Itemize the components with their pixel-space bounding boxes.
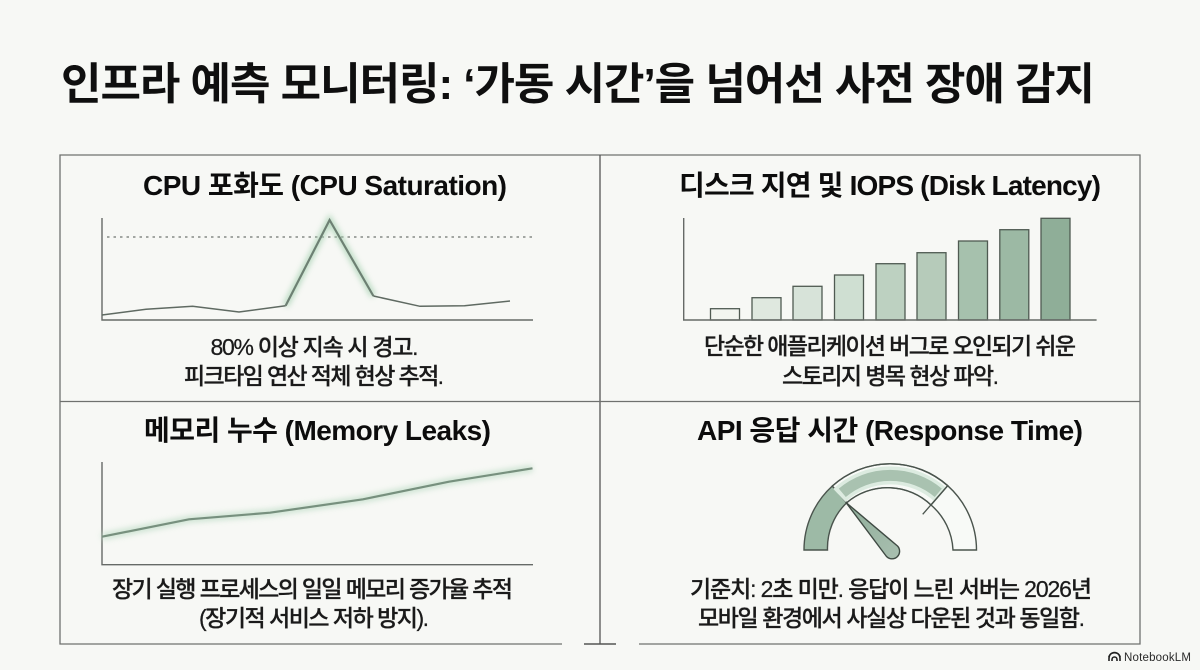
description: memory leaks bbox=[112, 576, 513, 631]
icon: NotebookLM logo bbox=[1108, 652, 1120, 661]
description: API response time: 모바일 환경에서 사실상 다운된 것과 동일함. bbox=[698, 605, 1085, 631]
gauge needle bbox=[846, 502, 900, 559]
description: disk latency: 스토리지 병목 현상 파악. bbox=[782, 363, 999, 389]
panel: memory leaks bbox=[102, 415, 533, 631]
description: CPU saturation: 80% 이상 지속 시 경고. bbox=[210, 334, 418, 360]
gauge: response time bbox=[804, 464, 976, 559]
gauge tick bbox=[923, 486, 948, 514]
heading: API response time: API 응답 시간 (Response Time) bbox=[697, 415, 1083, 446]
description: memory leaks: 장기 실행 프로세스의 일일 메모리 증가율 추적 bbox=[112, 576, 513, 602]
gauge right zone bbox=[931, 486, 976, 550]
heading: disk latency: 디스크 지연 및 IOPS (Disk Latency) bbox=[679, 170, 1101, 201]
title: 인프라 예측 모니터링: ‘가동 시간’을 넘어선 사전 장애 감지 bbox=[61, 60, 1095, 109]
panel: CPU saturation bbox=[102, 170, 533, 389]
heading: CPU saturation: CPU 포화도 (CPU Saturation) bbox=[143, 170, 507, 201]
panel: disk latency bbox=[679, 170, 1101, 389]
description: memory leaks: (장기적 서비스 저하 방지). bbox=[199, 605, 429, 631]
gauge left zone bbox=[804, 486, 847, 550]
panel: API response time bbox=[690, 415, 1092, 631]
description: CPU saturation: 피크타임 연산 적체 현상 추적. bbox=[184, 363, 444, 389]
panel grid frame bbox=[60, 155, 1140, 644]
description: API response time: 기준치: 2초 미만. 응답이 느린 서버는 2026년 bbox=[690, 576, 1092, 602]
bar chart: disk latency growth bbox=[684, 218, 1097, 320]
description: API response time bbox=[690, 576, 1092, 631]
line chart: memory growth bbox=[102, 462, 533, 565]
description: CPU saturation bbox=[184, 334, 444, 389]
description: disk latency bbox=[704, 333, 1076, 389]
description: disk latency: 단순한 애플리케이션 버그로 오인되기 쉬운 bbox=[704, 333, 1076, 359]
gauge band bbox=[832, 464, 948, 505]
watermark: NotebookLM: NotebookLM bbox=[1124, 652, 1191, 664]
heading: memory leaks: 메모리 누수 (Memory Leaks) bbox=[144, 415, 491, 446]
line chart: CPU usage with threshold bbox=[102, 218, 533, 320]
